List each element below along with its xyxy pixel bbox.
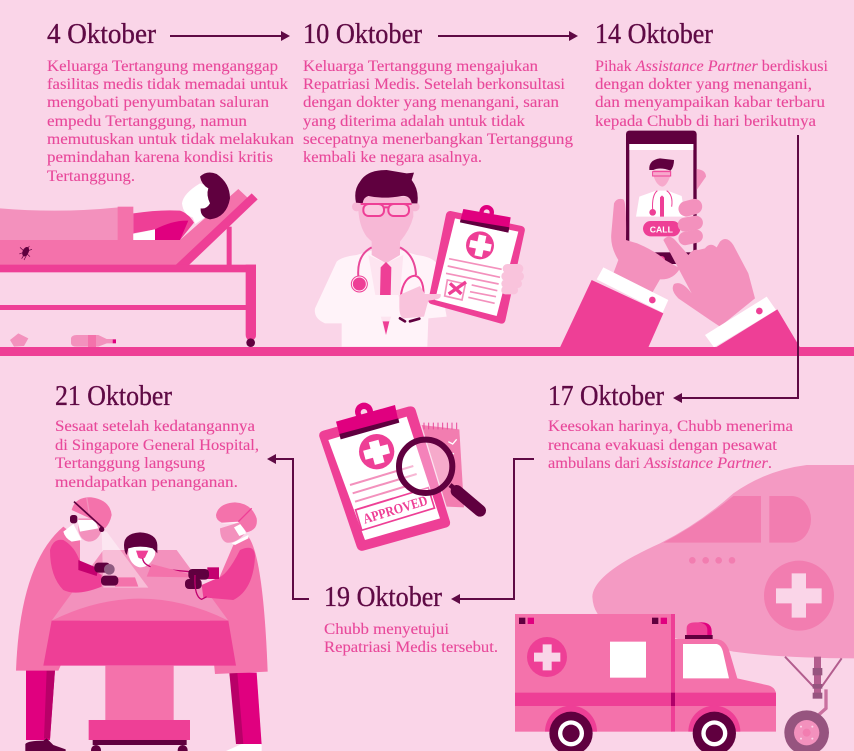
text block: 17 Oktober	[548, 381, 793, 472]
text block: 10 Oktober: kembali ke negara asalnya.	[303, 149, 482, 166]
icon: insect on bed	[19, 246, 32, 260]
text block: 17 Oktober: Keesokan harinya, Chubb menerima	[548, 418, 793, 435]
arrow: 17 to 19 Oktober	[451, 459, 534, 604]
text block: 14 Oktober: kepada Chubb di hari berikutnya	[595, 113, 816, 130]
illustration: surgeons operating on patient	[16, 497, 268, 751]
approved stamp: APPROVED	[361, 494, 430, 528]
ground bar	[0, 347, 854, 356]
text block: 10 Oktober: Keluarga Tertanggung mengajukan	[303, 58, 538, 75]
text block: 10 Oktober: dengan dokter yang menangani, saran	[303, 94, 559, 111]
text block: 21 Oktober	[55, 381, 259, 491]
illustration: doctor holding clipboard	[315, 170, 525, 347]
text block: 14 Oktober: 14 Oktober	[595, 19, 714, 50]
text block: 19 Oktober	[324, 582, 498, 656]
operating table	[43, 550, 236, 751]
text block: 4 Oktober: fasilitas medis tidak memadai untuk	[47, 76, 288, 93]
arrow: 19 to 21 Oktober	[267, 454, 309, 599]
left cuff and sleeve	[597, 267, 668, 313]
right hand	[663, 237, 755, 327]
text block: 21 Oktober: 21 Oktober	[55, 381, 173, 412]
text block: 4 Oktober: 4 Oktober	[47, 19, 157, 50]
text block: 4 Oktober: mengobati penyumbatan saluran	[47, 94, 269, 111]
text block: 4 Oktober: pemindahan karena kondisi kritis	[47, 149, 273, 166]
text block: 10 Oktober: 10 Oktober	[303, 19, 423, 50]
text block: 4 Oktober: memutuskan untuk tidak melakukan	[47, 131, 294, 148]
text block: 10 Oktober	[303, 19, 573, 166]
text block: 19 Oktober: 19 Oktober	[324, 582, 443, 613]
illustration: ambulance	[515, 614, 776, 751]
arrow: 4 to 10 Oktober	[170, 31, 290, 41]
text block: 10 Oktober: Repatriasi Medis. Setelah berkonsultasi	[303, 76, 566, 93]
text block: 4 Oktober: Tertanggung.	[47, 168, 135, 185]
text block: 4 Oktober: Keluarga Tertangung menganggap	[47, 58, 278, 75]
text block: 17 Oktober: 17 Oktober	[548, 381, 665, 412]
clipboard	[428, 205, 525, 324]
text block: 21 Oktober: Tertanggung langsung	[55, 455, 205, 472]
text block: 21 Oktober: Sesaat setelah kedatangannya	[55, 418, 255, 435]
left surgeon	[50, 497, 118, 593]
arrow: 10 to 14 Oktober	[438, 31, 578, 41]
arrow: 14 to 17 Oktober	[673, 135, 798, 403]
patient head with oxygen mask	[124, 532, 192, 577]
text block: 19 Oktober: Chubb menyetujui	[324, 621, 450, 638]
text block: 10 Oktober: yang diterima adalah untuk tidak	[303, 113, 525, 130]
text block: 10 Oktober: secepatnya menerbangkan Tertanggung	[303, 131, 573, 148]
illustration: airplane nose	[592, 465, 854, 751]
magnifier	[399, 440, 480, 511]
text block: 21 Oktober: di Singapore General Hospital,	[55, 437, 259, 454]
left hand	[611, 199, 680, 297]
text block: 21 Oktober: mendapatkan penanganan.	[55, 474, 238, 491]
call button	[643, 221, 680, 236]
text block: 4 Oktober	[47, 19, 294, 185]
text block: 14 Oktober	[595, 19, 829, 130]
text block: 14 Oktober: dan menyampaikan kabar terbaru	[595, 94, 825, 111]
illustration: approved document with magnifier	[319, 403, 480, 551]
illustration: hands holding smartphone	[560, 131, 800, 347]
text block: 14 Oktober: dengan dokter yang menangani,	[595, 76, 812, 93]
text block: 4 Oktober: empedu Tertanggung, namun	[47, 113, 247, 130]
call button: CALL	[650, 224, 674, 234]
illustration: patient on hospital bed	[0, 172, 258, 347]
text block: 19 Oktober: Repatriasi Medis tersebut.	[324, 639, 498, 656]
text block: 17 Oktober: ambulans dari Assistance Partner.	[548, 455, 772, 472]
right surgeon	[185, 502, 257, 600]
hands	[399, 264, 524, 318]
text block: 17 Oktober: rencana evakuasi dengan pesawat	[548, 437, 778, 454]
text block: 14 Oktober: Pihak Assistance Partner berdiskusi	[595, 58, 829, 75]
